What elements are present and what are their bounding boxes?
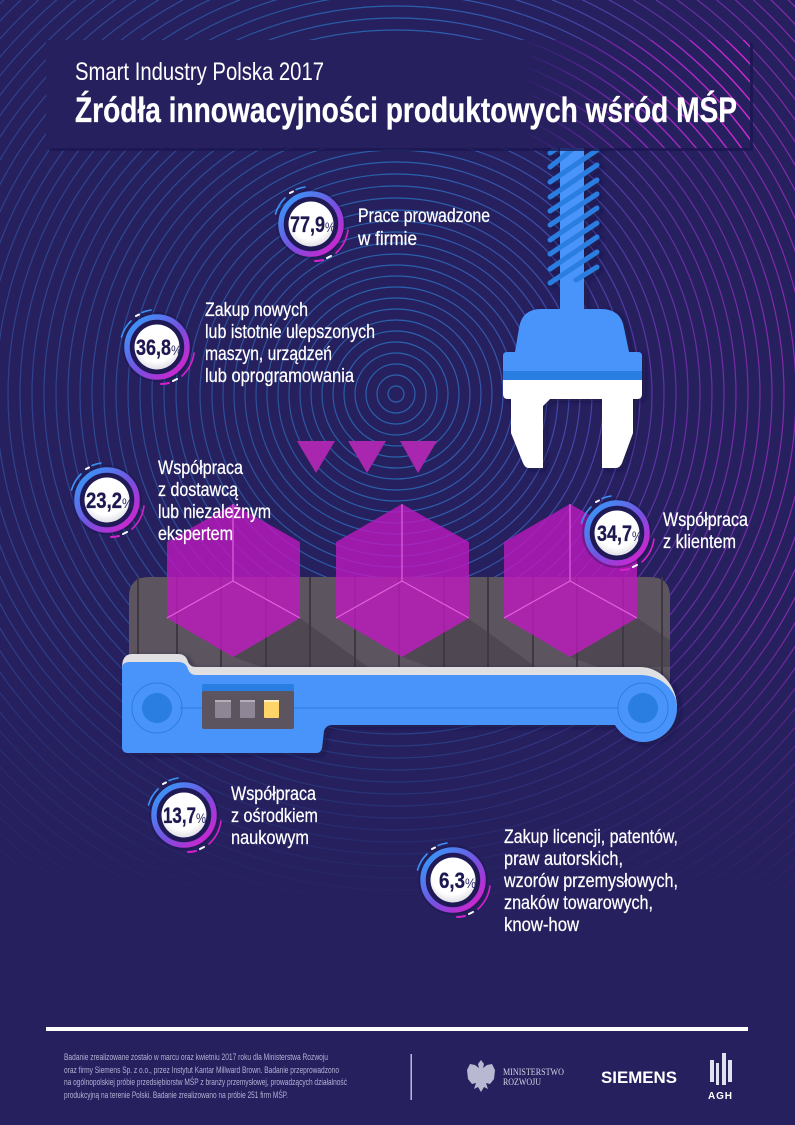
- stat: 23,2%: lub niezależnym: [158, 502, 271, 523]
- conveyor body: [122, 654, 677, 753]
- stat: 34,7%: z klientem: [663, 532, 736, 553]
- stat: 23,2%: z dostawcą: [158, 480, 238, 501]
- footnote: [64, 1052, 347, 1100]
- right wheel: [618, 683, 668, 733]
- hexagonal boxes: [167, 504, 637, 657]
- footnote: na ogólnopolskiej próbie przedsiębiorstw MŚP z branży przemysłowej, prowadzących działalność: [64, 1076, 347, 1087]
- stat: 77,9%: Prace prowadzone: [358, 206, 490, 227]
- footnote: Badanie zrealizowane zostało w marcu oraz kwietniu 2017 roku dla Ministerstwa Rozwoju: [64, 1052, 328, 1062]
- stat: 6,3%: [418, 827, 678, 936]
- stat: 6,3%: 6,3: [439, 868, 465, 893]
- divider: [410, 1054, 412, 1100]
- stat: 77,9%: [276, 187, 490, 261]
- stat: 23,2%: Współpraca: [158, 458, 243, 479]
- stat: 34,7%: %: [632, 528, 642, 544]
- left wheel: [132, 683, 182, 733]
- stat: 36,8%: [122, 300, 375, 387]
- stat: 36,8%: lub istotnie ulepszonych: [205, 322, 375, 343]
- logo: Siemens: SIEMENS: [601, 1068, 677, 1087]
- logo: Ministerstwo Rozwoju: [467, 1060, 564, 1092]
- stat: 34,7%: [582, 496, 748, 570]
- stat: 6,3%: znaków towarowych,: [504, 893, 653, 914]
- footnote: produkcyjną na terenie Polski. Badanie zrealizowano na próbie 251 firm MŚP.: [64, 1089, 288, 1100]
- stat: 36,8%: %: [171, 342, 182, 358]
- stat: 6,3%: Zakup licencji, patentów,: [504, 827, 678, 848]
- stat: 23,2%: ekspertem: [158, 524, 233, 545]
- stat: 23,2%: 23,2: [86, 488, 122, 513]
- concentric rings pattern: [0, 0, 795, 881]
- icon: robotic arm: [503, 148, 642, 468]
- stat: 6,3%: %: [465, 875, 476, 891]
- logo: Ministerstwo Rozwoju: MINISTERSTWO: [503, 1068, 564, 1078]
- stat: 13,7%: 13,7: [163, 803, 196, 828]
- logo: AGH: AGH: [708, 1091, 732, 1102]
- stat: 36,8%: Zakup nowych: [205, 300, 308, 321]
- icon: three arrows pointing down: [297, 441, 437, 473]
- stat: 6,3%: know-how: [504, 915, 579, 936]
- stat: 6,3%: praw autorskich,: [504, 849, 623, 870]
- stat: 13,7%: naukowym: [231, 828, 309, 849]
- stat: 13,7%: %: [196, 810, 206, 826]
- subtitle: Smart Industry Polska 2017: [75, 58, 324, 86]
- stat: 77,9%: %: [325, 219, 335, 235]
- stat: 13,7%: z ośrodkiem: [231, 806, 318, 827]
- stat: 13,7%: Współpraca: [231, 784, 316, 805]
- stat: 13,7%: [148, 778, 318, 852]
- logo: AGH: [708, 1053, 732, 1102]
- stat: 36,8%: maszyn, urządzeń: [205, 344, 332, 365]
- stat: 77,9%: 77,9: [290, 212, 325, 237]
- stat: 34,7%: 34,7: [597, 521, 632, 546]
- conveyor belt: [129, 577, 670, 682]
- header panel: [46, 40, 753, 151]
- footnote: oraz firmy Siemens Sp. z o.o., przez Instytut Kantar Millward Brown. Badanie przeprowadzono: [64, 1065, 339, 1075]
- footer rule: [46, 1027, 748, 1031]
- icon: eagle: [467, 1060, 495, 1092]
- logo: Ministerstwo Rozwoju: ROZWOJU: [503, 1078, 541, 1088]
- stat: 6,3%: wzorów przemysłowych,: [503, 871, 678, 892]
- stat: 23,2%: %: [122, 495, 133, 511]
- stat: 36,8%: lub oprogramowania: [205, 366, 354, 387]
- control panel: [202, 684, 294, 729]
- stat: 36,8%: 36,8: [136, 335, 171, 360]
- stat: 23,2%: [72, 458, 271, 545]
- stat: 34,7%: Współpraca: [663, 510, 748, 531]
- stat: 77,9%: w firmie: [357, 229, 417, 250]
